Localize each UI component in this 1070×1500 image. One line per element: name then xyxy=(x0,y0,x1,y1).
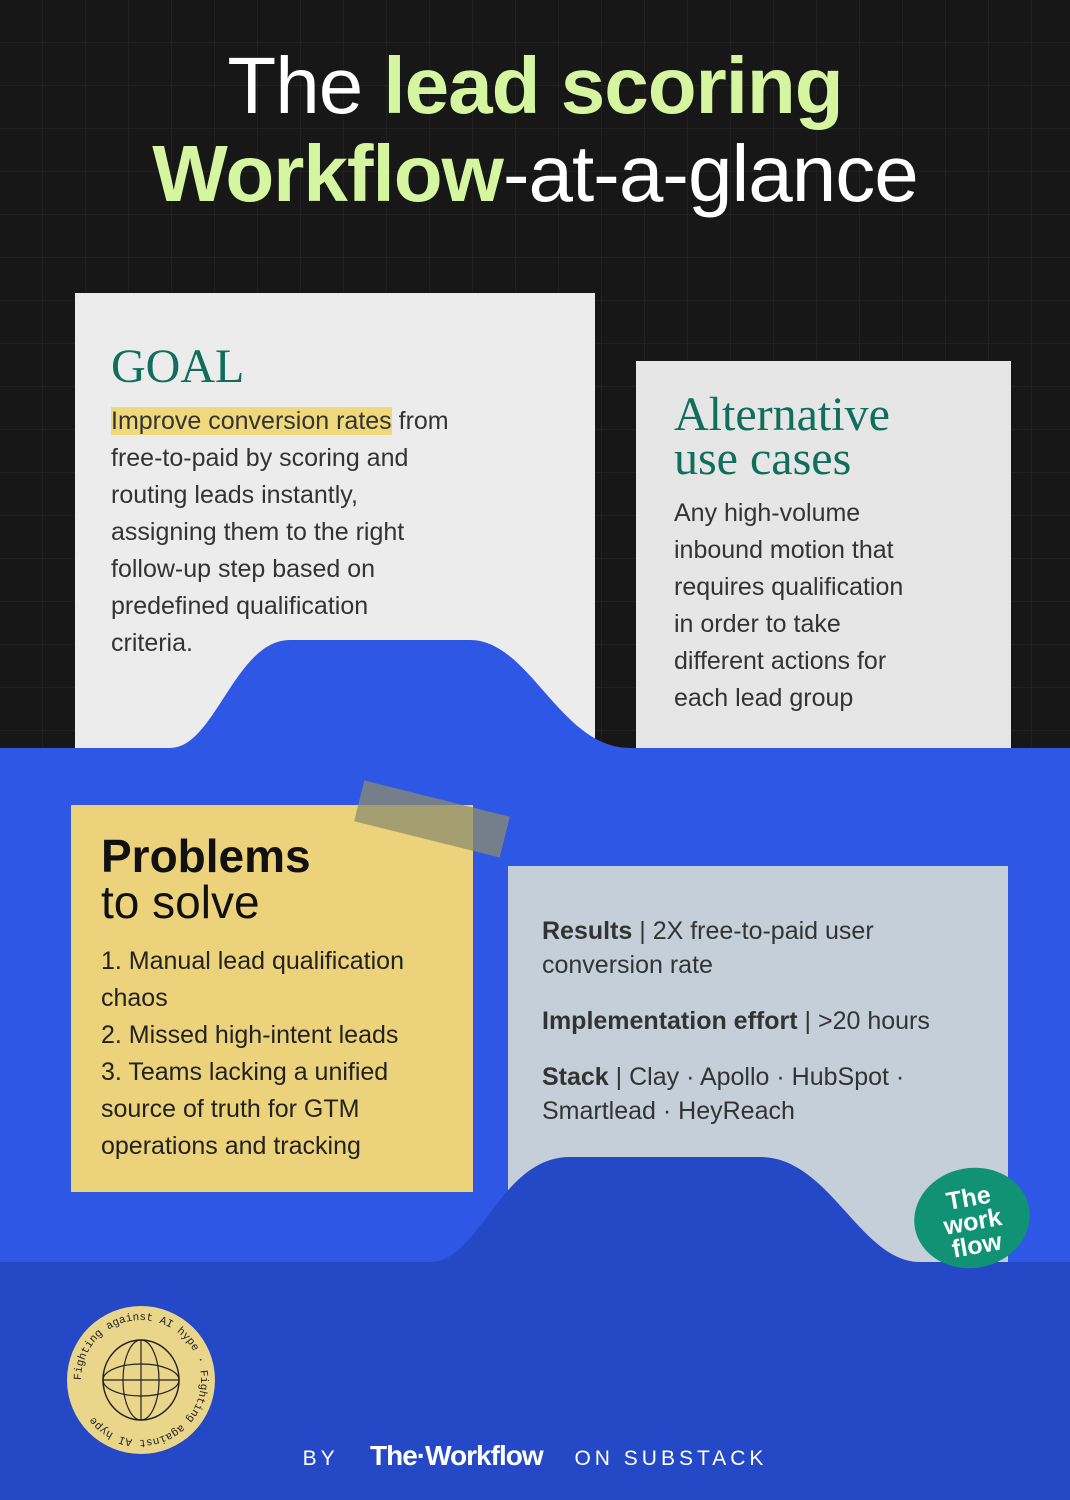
text: alternative: different actions for xyxy=(674,647,886,675)
text: goal: criteria. xyxy=(111,629,193,657)
list: problems: 1. Manual lead qualification chaos xyxy=(101,947,404,1012)
panel: alternative use cases xyxy=(636,361,1011,753)
background grid xyxy=(0,0,1070,748)
icon: globe badge: Fighting against AI hype · Fighting against AI hype xyxy=(74,1313,209,1448)
text: effort: Implementation effort | >20 hours xyxy=(542,1007,930,1035)
heading: alternative xyxy=(674,388,890,485)
icon: the workflow sticker: work xyxy=(942,1203,1004,1241)
text: alternative: Any high-volume xyxy=(674,499,860,527)
text: results: Results | 2X free-to-paid user conversion rate xyxy=(542,917,874,979)
text: alternative xyxy=(674,499,903,712)
text: goal xyxy=(111,407,449,657)
icon: the workflow sticker: The xyxy=(944,1181,993,1216)
text: alternative: inbound motion that xyxy=(674,536,894,564)
panel: problems xyxy=(71,805,473,1192)
text: goal: free-to-paid by scoring and xyxy=(111,444,408,472)
text: goal: assigning them to the right xyxy=(111,518,404,546)
panel: goal xyxy=(75,293,595,753)
text: goal: Improve conversion rates from xyxy=(111,407,449,435)
heading: alternative: Alternative xyxy=(674,388,890,441)
title xyxy=(152,41,918,218)
heading: goal: GOAL xyxy=(111,340,244,393)
footer: BY The·Workflow ON SUBSTACK xyxy=(303,1440,767,1471)
text: alternative: in order to take xyxy=(674,610,841,638)
heading: alternative: use cases xyxy=(674,432,851,485)
list: problems: 3. Teams lacking a unified source of truth for GTM operations and tracking xyxy=(101,1058,388,1160)
tape xyxy=(354,780,510,858)
icon: the workflow sticker: flow xyxy=(950,1227,1004,1264)
text: alternative: requires qualification xyxy=(674,573,903,601)
heading: problems xyxy=(101,830,311,928)
title: Workflow-at-a-glance xyxy=(152,129,918,218)
text: alternative: each lead group xyxy=(674,684,853,712)
text: stack: Stack | Clay · Apollo · HubSpot · Smartlead · HeyReach xyxy=(542,1063,904,1125)
text: goal: follow-up step based on xyxy=(111,555,375,583)
heading: problems: to solve xyxy=(101,876,260,928)
panel: results xyxy=(508,866,1008,1262)
list: problems xyxy=(101,947,404,1160)
list: problems: 2. Missed high-intent leads xyxy=(101,1021,398,1049)
heading: problems: Problems xyxy=(101,830,311,882)
title: The lead scoring xyxy=(227,41,843,130)
text: goal: predefined qualification xyxy=(111,592,368,620)
icon: the workflow sticker xyxy=(906,1159,1038,1277)
text: goal: routing leads instantly, xyxy=(111,481,358,509)
